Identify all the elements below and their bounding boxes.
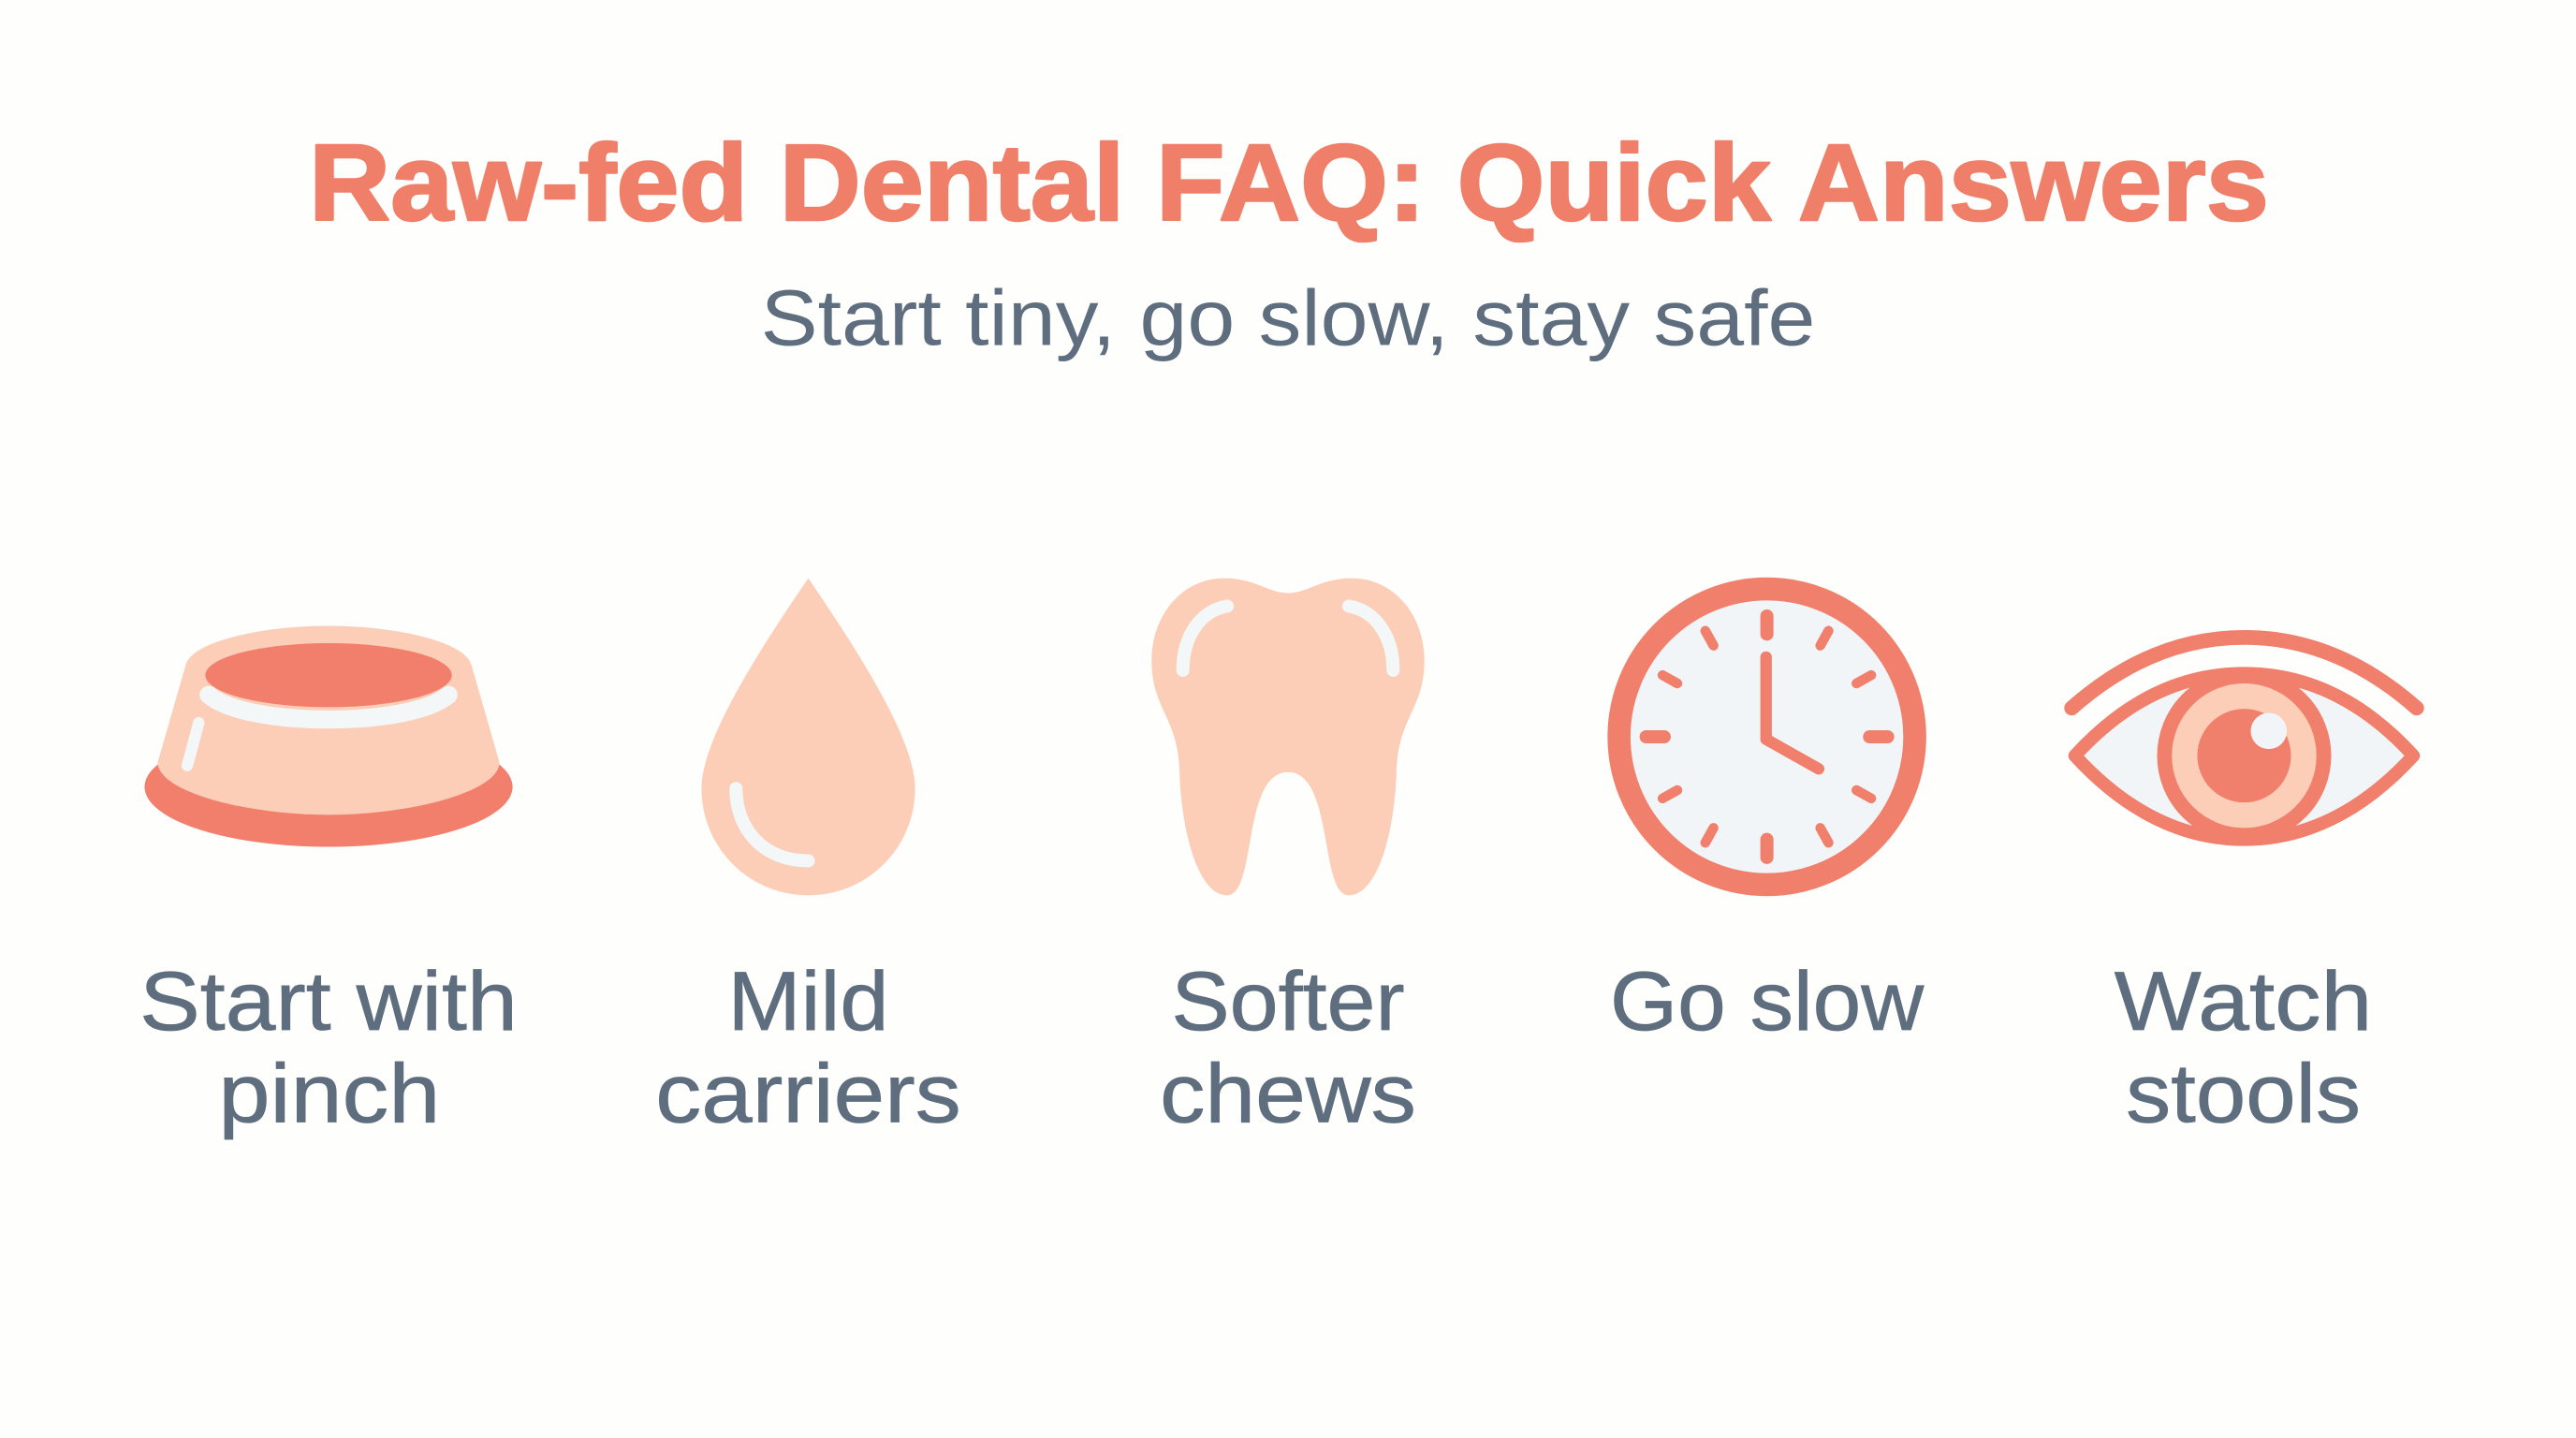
label: softer chews: chews <box>1160 1046 1416 1139</box>
label: mild carriers: Mild <box>728 954 889 1048</box>
label: softer chews: Softer <box>1171 954 1405 1048</box>
icon: droplet <box>701 579 915 895</box>
label: watch stools: stools <box>2126 1046 2361 1139</box>
label: watch stools: Watch <box>2115 954 2372 1048</box>
title: Raw-fed Dental FAQ: Quick Answers <box>309 122 2269 243</box>
label: mild carriers: carriers <box>655 1046 961 1139</box>
icon: eye <box>2071 638 2417 840</box>
label: mild carriers <box>655 954 961 1139</box>
label: start with pinch: Start with <box>139 954 518 1048</box>
label: watch stools <box>2115 954 2372 1139</box>
icon: food bowl <box>144 626 513 847</box>
icon: clock <box>1619 589 1915 885</box>
label: go slow: Go slow <box>1610 954 1925 1048</box>
subtitle: Start tiny, go slow, stay safe <box>761 274 1815 361</box>
label: start with pinch <box>139 954 518 1139</box>
icon: tooth <box>1151 579 1425 895</box>
label: start with pinch: pinch <box>218 1046 440 1139</box>
label: softer chews <box>1160 954 1416 1139</box>
